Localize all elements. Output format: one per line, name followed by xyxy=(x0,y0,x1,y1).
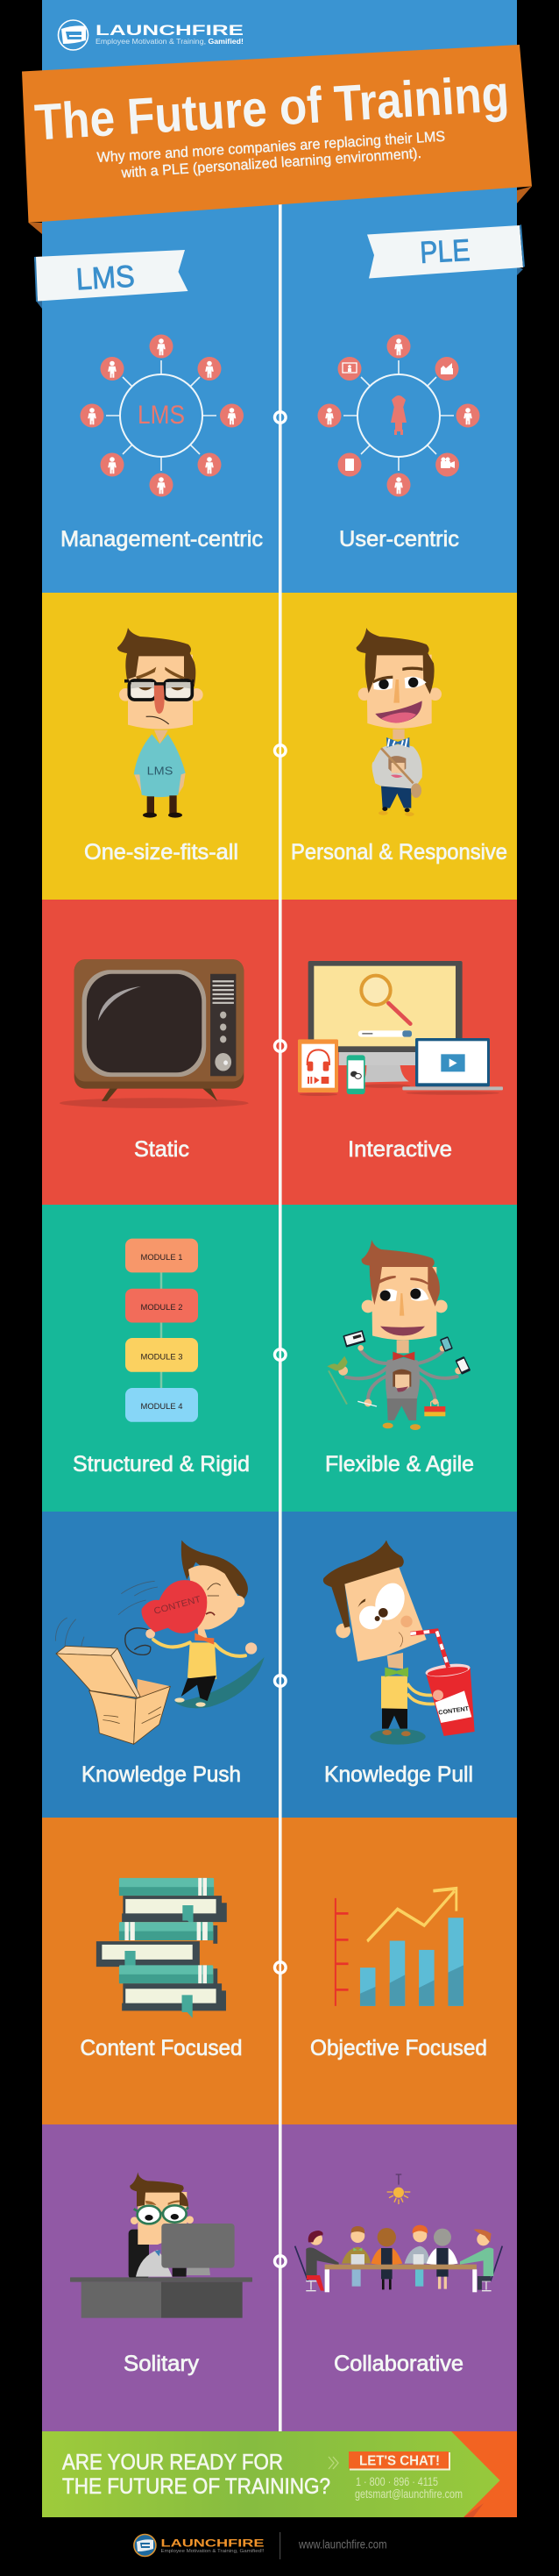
contact details: 1 · 800 · 896 · 4115 xyxy=(356,2475,438,2488)
illustration: module stack: MODULE 3 xyxy=(141,1352,182,1361)
section: solitary vs collaborative xyxy=(42,2124,517,2431)
label: knowledge push: Knowledge Push xyxy=(81,1762,241,1787)
label: static: Static xyxy=(134,1137,189,1162)
logo: Launchfire footer: LAUNCHFIRE xyxy=(161,2539,265,2550)
ribbon: PLE xyxy=(367,224,525,279)
ribbon: PLE: PLE xyxy=(419,233,471,270)
heading: CTA: THE FUTURE OF TRAINING? xyxy=(62,2474,330,2499)
illustration: worker alone at desk xyxy=(70,2172,252,2318)
label: user-centric: User-centric xyxy=(339,527,459,551)
character: content drinker: CONTENT xyxy=(438,1706,470,1717)
illustration: module stack: MODULE 1 xyxy=(141,1252,182,1262)
diagram: LMS hub xyxy=(81,335,244,496)
logo: Launchfire footer: Employee Motivation & Training, Gamified!! xyxy=(161,2549,265,2554)
section: knowledge push vs pull xyxy=(42,1512,517,1818)
icon: chevrons xyxy=(329,2457,338,2469)
call to action banner xyxy=(42,2431,517,2517)
section: static vs interactive xyxy=(42,900,517,1205)
character: multitasking learner xyxy=(327,1240,471,1430)
character: sad LMS learner xyxy=(117,628,203,818)
label: knowledge pull: Knowledge Pull xyxy=(324,1762,473,1787)
section: structured vs flexible xyxy=(42,1205,517,1512)
illustration: module stack: MODULE 2 xyxy=(141,1302,182,1312)
section: management vs user centric xyxy=(42,0,517,593)
website: www.launchfire.com xyxy=(298,2537,387,2551)
label: interactive: Interactive xyxy=(348,1137,452,1162)
character: content boxing glove: CONTENT xyxy=(153,1595,202,1617)
label: collaborative: Collaborative xyxy=(334,2352,463,2376)
subtitle: Why more and more companies are replacing their LMS xyxy=(96,129,446,166)
diagram: LMS hub: LMS xyxy=(138,401,185,430)
logo: Launchfire header: LAUNCHFIRE xyxy=(96,23,244,39)
center divider line xyxy=(279,202,282,2431)
diagram: PLE hub xyxy=(317,335,480,496)
section: content vs objective xyxy=(42,1818,517,2124)
footer xyxy=(134,2532,387,2559)
label: objective focused: Objective Focused xyxy=(310,2036,487,2060)
illustration: module stack xyxy=(125,1239,198,1422)
button: let's chat: LET'S CHAT! xyxy=(359,2453,440,2469)
logo: Launchfire header xyxy=(58,20,244,50)
button: let's chat xyxy=(349,2451,450,2471)
illustration: module stack: MODULE 4 xyxy=(141,1401,182,1411)
subtitle xyxy=(96,129,446,181)
heading: title: The Future of Training xyxy=(33,65,511,152)
label: content focused: Content Focused xyxy=(81,2036,242,2060)
section: one size vs personal xyxy=(42,593,517,900)
label: structured and rigid: Structured & Rigid xyxy=(73,1452,250,1477)
illustration: stacked books xyxy=(96,1878,227,2018)
label: one-size-fits-all: One-size-fits-all xyxy=(84,840,238,865)
heading: CTA xyxy=(62,2450,330,2499)
ribbon: LMS: LMS xyxy=(75,260,136,296)
contact details: getsmart@launchfire.com xyxy=(355,2487,463,2501)
illustration: old television xyxy=(60,959,249,1108)
character: content boxing glove xyxy=(55,1541,265,1744)
chart: rising bars with arrow xyxy=(336,1889,463,2006)
icon: light bulb xyxy=(387,2174,410,2204)
subtitle: with a PLE (personalized learning environment). xyxy=(120,146,422,181)
character: content drinker xyxy=(323,1541,475,1745)
ribbon: LMS xyxy=(34,250,188,309)
character: happy PLE learner xyxy=(357,628,442,816)
contact details xyxy=(355,2475,463,2501)
logo: Launchfire header: Employee Motivation & Training, Gamified! xyxy=(96,37,244,46)
logo: Launchfire footer xyxy=(134,2534,265,2557)
title banner xyxy=(22,45,532,234)
heading: CTA: ARE YOUR READY FOR xyxy=(62,2450,283,2474)
illustration: multi-device screens xyxy=(298,961,503,1096)
label: management-centric: Management-centric xyxy=(60,527,263,551)
label: solitary: Solitary xyxy=(124,2352,200,2376)
timeline nodes xyxy=(273,410,287,2268)
label: personal and responsive: Personal & Responsive xyxy=(291,840,507,865)
character: sad LMS learner: LMS xyxy=(147,764,173,777)
illustration: team meeting table xyxy=(295,2174,502,2292)
label: flexible and agile: Flexible & Agile xyxy=(325,1452,474,1477)
